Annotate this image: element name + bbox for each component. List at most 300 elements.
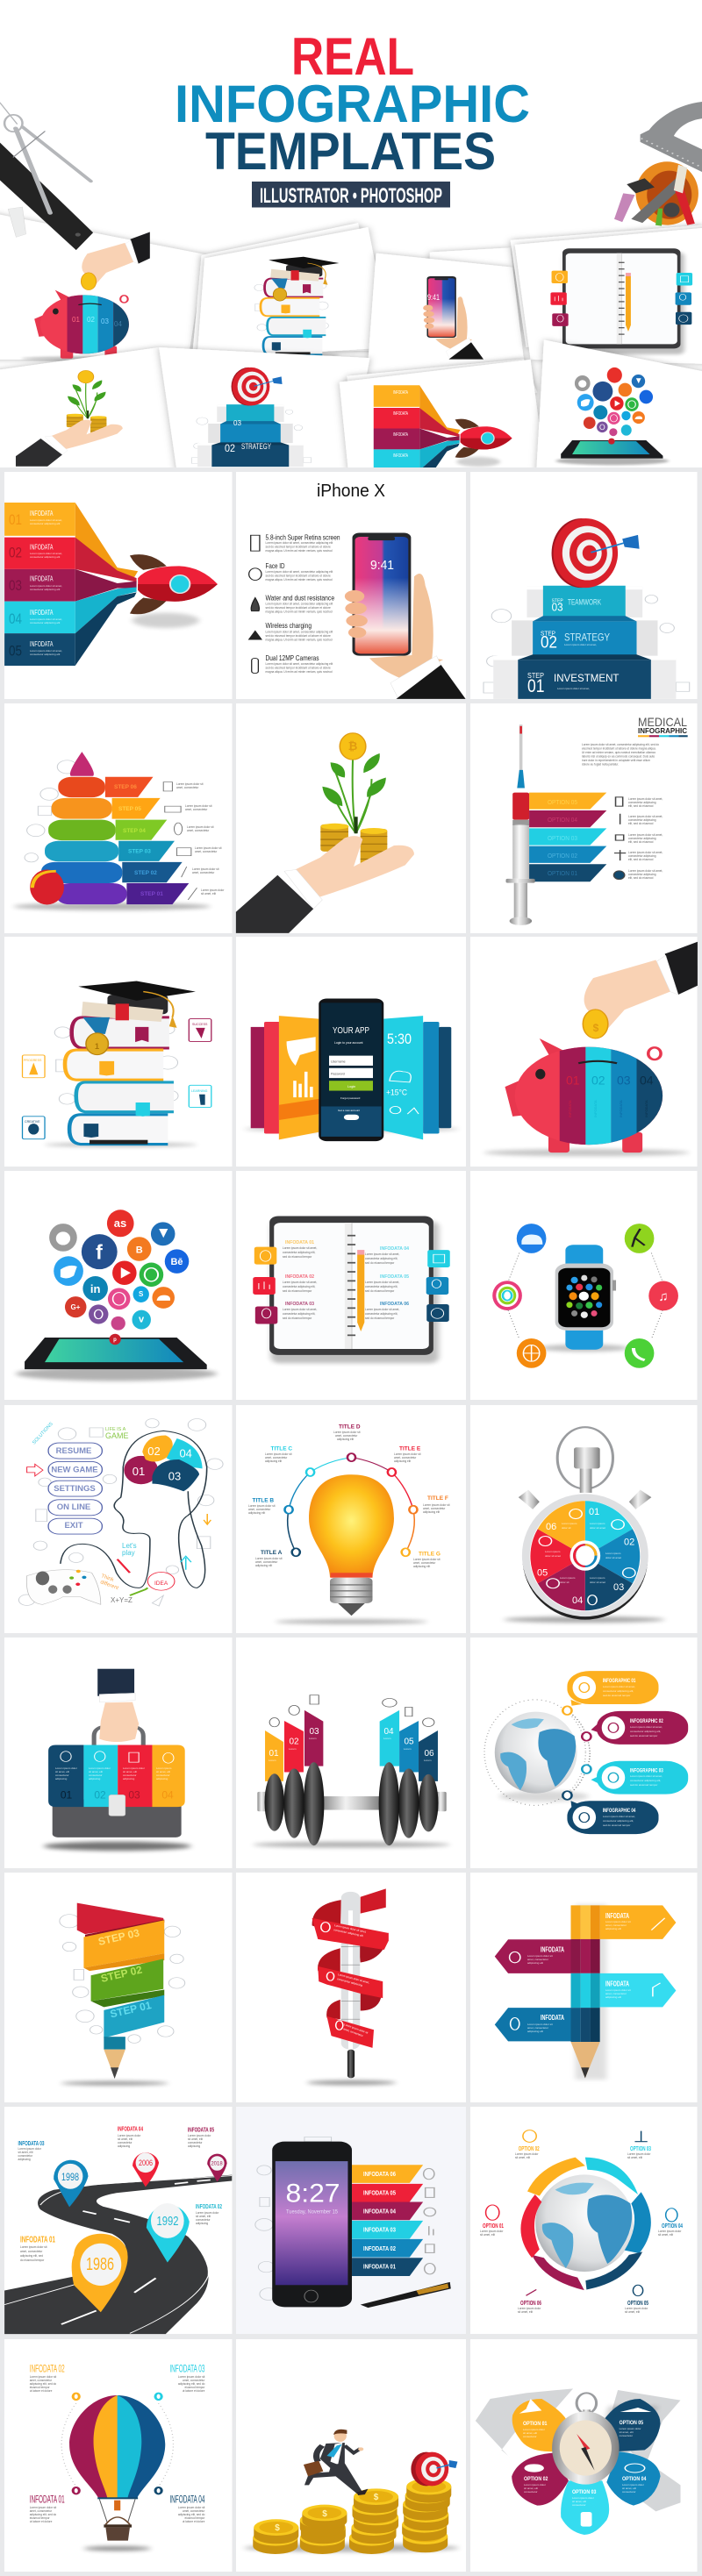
ribbon copy: Lorem ipsum dolor sit amet, [338, 1973, 370, 1985]
doodle captions: GAME [105, 1431, 129, 1440]
band labels: INFODATA 03 [363, 2228, 396, 2234]
band labels: INFODATA 01 [363, 2265, 396, 2271]
menu labels [51, 1446, 98, 1531]
step labels: STEP [527, 672, 544, 680]
piggy numbers: 02 [591, 1074, 605, 1088]
callout titles [603, 1678, 663, 1814]
paper: phone card [367, 247, 524, 375]
pin years: 2018 [211, 2161, 223, 2166]
ribbon copy: Lorem ipsum dolor sit amet, [334, 1923, 367, 1934]
menu labels: RESUME [56, 1446, 91, 1456]
road copy: adipiscing [18, 2158, 31, 2161]
balloon copy: ut labore et dolore [183, 2389, 205, 2393]
road copy: amet, consectetur [20, 2250, 43, 2253]
option labels: OPTION 03 [630, 2146, 651, 2152]
step labels: STRATEGY [564, 631, 610, 643]
road copy: adipiscing elit, sed [20, 2254, 43, 2258]
bulb captions [248, 1431, 450, 1568]
feature text: magna aliqua. Ut enim ad minim veniam, quis nostrud [265, 639, 333, 642]
notebook entries: INFODATA 04 [380, 1246, 409, 1252]
band labels: 03 [9, 577, 22, 594]
road copy: adipiscing [118, 2144, 130, 2148]
panel: hot air balloon [4, 2339, 232, 2572]
app screen text: Username [331, 1060, 346, 1063]
coin stacks and runner artwork [244, 2430, 459, 2554]
ring captions [176, 782, 225, 896]
panel: piggy bank [470, 937, 698, 1167]
hero card labels: 03 [233, 419, 242, 427]
ring labels [114, 784, 163, 897]
step labels: Lorem ipsum dolor sit amet, [557, 687, 590, 690]
panel: light bulb timeline [236, 1405, 466, 1633]
option captions: consectetur adipiscing [628, 873, 656, 876]
ribbon step labels: STEP 02 [100, 1963, 144, 1985]
ring labels: STEP 01 [140, 891, 163, 897]
ring captions: Lorem ipsum dolor sit [187, 825, 214, 829]
briefcase copy: sit amet, elit [55, 1770, 69, 1773]
coin dollar signs: $ [374, 2493, 379, 2502]
panel: rocket infographic [4, 472, 232, 699]
stopwatch copy: dolor sit [560, 1581, 569, 1584]
bulb titles: TITLE D [339, 1424, 361, 1431]
phone heading: iPhone X [317, 482, 385, 501]
pin years: 1986 [86, 2255, 114, 2274]
panel: target stairs [470, 472, 697, 699]
paper: books card [192, 223, 391, 360]
notebook entries: INFODATA 05 [380, 1274, 409, 1280]
bulb titles: TITLE A [261, 1550, 283, 1556]
paper: notebook card [511, 225, 702, 364]
option copy: sit amet, elit [480, 2233, 495, 2237]
bulb captions: Lorem ipsum dolor sit [394, 1452, 421, 1456]
notebook body copy: Lorem ipsum dolor sit amet, [365, 1281, 399, 1284]
globe artwork [484, 1671, 688, 1834]
title [175, 27, 530, 181]
bulb titles: TITLE B [253, 1498, 274, 1504]
feature text: sed do eiusmod tempor incididunt ut labore et dolore [265, 546, 331, 549]
callout titles: INFOGRAPHIC 01 [603, 1678, 636, 1684]
balloon copy: adipiscing elit, sed do [30, 2382, 56, 2386]
piggy stripe captions: INFODATA [593, 1100, 598, 1117]
option labels: OPTION 05 [627, 2301, 648, 2307]
coin dollar signs: $ [322, 2509, 327, 2519]
step labels: Lorem ipsum dolor sit amet, [564, 643, 597, 646]
balloon copy: eiusmod tempor [185, 2386, 205, 2389]
social icon letters: f [96, 1240, 103, 1263]
stopwatch numbers: 05 [537, 1568, 548, 1579]
road copy: Lorem ipsum dolor [18, 2147, 42, 2151]
ribbon copy: consectetur adipiscing elit [333, 1928, 363, 1937]
social icon letters: v [139, 1315, 145, 1325]
option labels: OPTION 01 [548, 871, 577, 877]
dumbbell copy [269, 1737, 432, 1762]
briefcase copy: sit amet, elit [89, 1770, 103, 1773]
compass option copy: Lorem ipsum dolor [523, 2428, 545, 2431]
bulb captions: Lorem ipsum dolor sit [413, 1558, 441, 1561]
doodle captions: Let's [122, 1542, 137, 1550]
band labels: INFODATA 05 [363, 2191, 396, 2197]
feature text: Face ID [265, 561, 284, 570]
option copy: Lorem ipsum dolor [658, 2230, 682, 2233]
feature text: Lorem ipsum dolor sit amet, consectetur adipiscing elit [265, 570, 333, 574]
ring labels: STEP 03 [128, 849, 151, 854]
feature text: sed do eiusmod tempor incididunt ut labore et dolore [265, 634, 331, 638]
callout copy: Lorem ipsum dolor sit amet, [630, 1774, 663, 1778]
road copy: Lorem ipsum dolor sit [20, 2245, 47, 2249]
plant in hand artwork [236, 733, 414, 933]
doodle captions: play [122, 1549, 135, 1557]
notebook body copy: sed do eiusmod tempor [283, 1289, 312, 1293]
pin years: 2006 [139, 2159, 153, 2167]
dumbbell step numbers: 05 [404, 1737, 414, 1747]
feature text: magna aliqua. Ut enim ad minim veniam, quis nostrud [265, 670, 333, 674]
road copy: sit amet, elit [118, 2137, 133, 2141]
bulb captions: adipiscing elit [337, 1438, 354, 1441]
menu labels: NEW GAME [51, 1465, 98, 1475]
option copy: sit amet, elit [518, 2310, 533, 2314]
rocket artwork [4, 503, 218, 666]
band labels: consectetur adipiscing elit [30, 555, 61, 559]
callout copy: Lorem ipsum dolor sit amet, [603, 1685, 635, 1688]
brain numbers: 02 [147, 1445, 161, 1458]
dumbbell copy: Lorem [424, 1759, 432, 1762]
notebook body copy: Lorem ipsum dolor sit amet, [365, 1252, 399, 1256]
notebook body copy: consectetur adipiscing elit, [365, 1257, 398, 1260]
option labels: OPTION 01 [483, 2223, 504, 2230]
ring captions: Lorem ipsum dolor sit [176, 782, 204, 786]
compass option copy: sit amet, elit [572, 2500, 586, 2503]
ring captions: sit amet, elit [201, 892, 216, 896]
bulb titles: TITLE F [427, 1495, 448, 1502]
road copy: consectetur [118, 2141, 133, 2144]
syringe and option bands [506, 724, 688, 925]
bulb captions: amet, consectetur [413, 1561, 436, 1565]
option copy: sit amet, elit [627, 2156, 642, 2159]
briefcase copy: consectetur [89, 1773, 103, 1777]
signpost labels: INFODATA [605, 1980, 629, 1987]
option labels: OPTION 03 [548, 836, 577, 842]
hero card labels: 03 [101, 318, 109, 325]
protractor [641, 101, 702, 176]
step labels [527, 598, 620, 696]
bulb titles: TITLE C [270, 1446, 292, 1452]
compass option copy [523, 2427, 644, 2507]
notebook entries: INFODATA 02 [285, 1274, 314, 1280]
brain numbers: 04 [179, 1447, 192, 1460]
social icon letters: Bē [170, 1257, 183, 1267]
briefcase copy: adipiscing [89, 1777, 101, 1780]
callout copy: Lorem ipsum dolor sit amet, [603, 1815, 635, 1818]
compass option copy: consectetur [523, 2435, 537, 2438]
balloon copy: amet, consectetur [30, 2379, 53, 2382]
balloon copy: adipiscing elit, sed do [178, 2513, 205, 2516]
balloon titles: INFODATA 02 [30, 2364, 65, 2374]
road copy: sit amet, elit [18, 2151, 33, 2154]
panel: phone clock bands [236, 2107, 466, 2334]
panel: smartwatch [470, 1171, 697, 1400]
panel: dumbbell [236, 1638, 466, 1868]
briefcase copy: Lorem ipsum dolor [89, 1766, 111, 1770]
feature text: magna aliqua. Ut enim ad minim veniam, quis nostrud [265, 549, 333, 553]
hero collage [0, 101, 702, 491]
compass option labels: OPTION 02 [524, 2476, 548, 2482]
compass option labels: OPTION 03 [572, 2489, 597, 2495]
road copy [18, 2134, 219, 2262]
bulb captions: amet, consectetur [265, 1456, 288, 1459]
road copy: consectetur [18, 2154, 33, 2158]
hero card labels: 02 [87, 316, 95, 324]
bulb captions: adipiscing elit [265, 1459, 282, 1463]
stopwatch copy: Lorem ipsum [605, 1552, 621, 1555]
band labels [363, 2172, 396, 2271]
signpost copy: amet, consectetur [527, 2026, 548, 2030]
brain artwork [18, 1419, 223, 1606]
title line: TEMPLATES: TEMPLATES [205, 122, 496, 181]
road labels: INFODATA 01 [20, 2235, 55, 2244]
notebook body copy: sed do eiusmod tempor [283, 1317, 312, 1320]
stopwatch copy: Lorem ipsum [562, 1522, 577, 1525]
panel: pencil signpost [470, 1873, 697, 2102]
medical paragraph [582, 743, 659, 767]
band labels: Lorem ipsum dolor sit amet, [30, 552, 62, 555]
option labels: OPTION 06 [520, 2301, 541, 2307]
signpost copy: adipiscing elit [605, 1995, 621, 1999]
briefcase numbers [61, 1788, 174, 1801]
ring labels: STEP 04 [123, 828, 146, 834]
balloon copy: amet, consectetur [183, 2379, 205, 2382]
briefcase copy: consectetur [156, 1773, 170, 1777]
stopwatch copy: Lorem ipsum [560, 1576, 576, 1580]
bulb captions: Lorem ipsum dolor sit [248, 1504, 276, 1508]
band labels: consectetur adipiscing elit [30, 522, 61, 525]
panel: pencil ribbon [4, 1873, 232, 2102]
social icon letters: G+ [71, 1303, 81, 1311]
briefcase copy: consectetur [123, 1773, 137, 1777]
social artwork [16, 1210, 217, 1381]
menu labels: EXIT [64, 1521, 83, 1531]
paper: rocket card [340, 359, 545, 491]
road labels: INFODATA 05 [188, 2128, 214, 2134]
signpost copy: adipiscing elit [527, 2030, 543, 2033]
dumbbell step numbers: 03 [309, 1727, 319, 1737]
stopwatch copy: dolor sit amet [545, 1554, 561, 1558]
stopwatch numbers: 06 [546, 1522, 556, 1532]
road labels: INFODATA 03 [18, 2141, 45, 2147]
bulb titles: TITLE E [399, 1446, 421, 1452]
signpost copy: Lorem ipsum dolor sit [605, 1988, 631, 1992]
piggy stripe captions: INFODATA [644, 1100, 648, 1117]
callout titles: INFOGRAPHIC 04 [603, 1808, 636, 1814]
compass option labels: OPTION 01 [523, 2421, 548, 2427]
option captions: Lorem ipsum dolor sit amet, [628, 815, 663, 818]
feature text: Wireless charging [265, 621, 312, 630]
option labels: OPTION 02 [519, 2146, 540, 2152]
notebook artwork [253, 1216, 450, 1363]
option captions: Lorem ipsum dolor sit amet, [628, 797, 663, 801]
paper: piggy card [0, 213, 204, 360]
menu labels: SETTINGS [54, 1484, 96, 1494]
app phone artwork [244, 999, 459, 1141]
callout copy: consectetur adipiscing elit, [630, 1730, 661, 1733]
ribbon step labels: STEP 03 [97, 1926, 141, 1948]
balloon copy: amet, consectetur [183, 2509, 205, 2513]
step labels: 03 [552, 600, 563, 613]
clock text: 8:27 [286, 2179, 340, 2209]
ring captions: Lorem ipsum dolor sit [195, 846, 222, 850]
piggy artwork [484, 942, 698, 1156]
compass option labels: OPTION 05 [620, 2420, 643, 2426]
ring labels: STEP 05 [118, 806, 141, 812]
balloon copy: ut labore et dolore [30, 2520, 53, 2523]
pencil cup [614, 161, 698, 226]
app screen text: Login to your account [334, 1041, 362, 1045]
tag labels and medal number: SUCCESS [192, 1023, 208, 1026]
panel: iPhone X features [236, 472, 466, 699]
doodle captions: SOLUTIONS [32, 1421, 54, 1445]
feature text: Lorem ipsum dolor sit amet, consectetur adipiscing elit [265, 541, 333, 545]
road copy: sit amet, elit [188, 2137, 203, 2141]
bulb captions: amet, consectetur [335, 1434, 358, 1438]
notebook body copy: Lorem ipsum dolor sit amet, [283, 1246, 317, 1250]
briefcase copy: adipiscing [123, 1777, 135, 1780]
compass option copy: Lorem ipsum dolor [620, 2427, 641, 2430]
panel: globe arrows [470, 2107, 697, 2334]
stopwatch numbers [537, 1507, 634, 1606]
feature text: 5.8-inch Super Retina screen [265, 532, 340, 541]
eraser [8, 207, 26, 237]
dumbbell step numbers: 04 [383, 1727, 394, 1737]
compass option copy: Lorem ipsum dolor [572, 2496, 594, 2500]
step labels: STEP [541, 630, 555, 638]
hero card labels: 04 [114, 320, 122, 328]
balloon copy: adipiscing elit, sed do [30, 2513, 56, 2516]
signpost copy: amet, consectetur [605, 1923, 627, 1927]
balloon copy [30, 2375, 205, 2523]
option labels: OPTION 04 [548, 817, 577, 824]
piggy numbers [566, 1074, 654, 1088]
balloon copy: adipiscing elit, sed do [178, 2382, 205, 2386]
social icon letters: in [90, 1282, 101, 1295]
band labels: 02 [9, 545, 22, 561]
panel: game brain [4, 1405, 232, 1633]
social icon letters: as [114, 1217, 126, 1230]
doodle captions: X+Y=Z [111, 1596, 133, 1604]
option labels: OPTION 04 [662, 2223, 683, 2230]
signpost copy: amet, consectetur [527, 1958, 548, 1961]
callout copy: sed do eiusmod tempor [630, 1783, 657, 1787]
ribbon step labels: STEP 01 [109, 1999, 153, 2020]
notebook body copy: consectetur adipiscing elit, [365, 1285, 398, 1288]
road copy: consectetur [196, 2218, 211, 2222]
briefcase copy: consectetur [55, 1773, 69, 1777]
dumbbell copy: Lorem [269, 1759, 276, 1762]
option copy: Lorem ipsum dolor [625, 2307, 648, 2310]
band labels: Lorem ipsum dolor sit amet, [30, 617, 62, 621]
notebook body copy: consectetur adipiscing elit, [283, 1285, 315, 1288]
road copy: Lorem ipsum dolor [188, 2134, 211, 2137]
panel: businessman on coins [236, 2339, 466, 2572]
ring captions: amet, consectetur [176, 786, 199, 789]
balloon copy: Lorem ipsum dolor sit [30, 2375, 56, 2379]
compass option labels: OPTION 04 [622, 2476, 647, 2482]
option copy: sit amet, elit [658, 2233, 673, 2237]
notebook body copy: consectetur adipiscing elit, [283, 1312, 315, 1316]
compass tool [0, 103, 91, 213]
notebook body copy: consectetur adipiscing elit, [283, 1251, 315, 1254]
road copy: Lorem ipsum dolor [196, 2211, 219, 2215]
hero card labels: 9:41 [427, 293, 440, 302]
ring captions: Lorem ipsum dolor sit [185, 804, 212, 808]
compass option copy: consectetur [622, 2490, 636, 2494]
signpost copy: adipiscing elit [605, 1927, 621, 1930]
panel: notebook [236, 1171, 466, 1400]
ribbon copy: amet, consectetur [343, 2027, 363, 2037]
software badge: ILLUSTRATOR • PHOTOSHOP [260, 184, 442, 208]
app screen text: Get a new account [338, 1109, 360, 1112]
option copy [480, 2152, 682, 2314]
piggy stripe captions: INFODATA [619, 1100, 623, 1117]
compass artwork [476, 2388, 681, 2535]
doodle captions: Think [100, 1573, 115, 1583]
tag labels and medal number: CREATIVE [25, 1120, 40, 1124]
bulb captions: adipiscing elit [423, 1510, 440, 1514]
callout copy: consectetur adipiscing elit, [603, 1689, 634, 1693]
hero card labels: 01 [72, 316, 80, 324]
bulb captions: amet, consectetur [255, 1560, 278, 1564]
briefcase copy: Lorem ipsum [156, 1766, 172, 1770]
ribbon copy: consectetur adipiscing [337, 1977, 363, 1987]
band labels: INFODATA 04 [363, 2209, 396, 2216]
panel: thermometer ribbon [236, 1873, 466, 2102]
bitcoin symbol: ₿ [348, 739, 357, 753]
dumbbell step numbers: 06 [424, 1749, 434, 1759]
medical paragraph: eiusmod tempor incididunt ut labore et dolore magna aliqua. [582, 747, 656, 751]
option captions: consectetur adipiscing [628, 854, 656, 858]
signpost artwork [495, 1904, 676, 2080]
notebook body copy: sed do eiusmod tempor [365, 1317, 395, 1320]
signpost copy: Lorem ipsum dolor sit [527, 1954, 553, 1958]
stopwatch copy: dolor sit amet [590, 1526, 605, 1530]
panel: road timeline [4, 2107, 232, 2334]
option captions: Lorem ipsum dolor sit amet, [628, 833, 663, 837]
clock text: Tuesday, November 15 [286, 2210, 339, 2216]
bulb captions: Lorem ipsum dolor sit [255, 1557, 283, 1560]
stopwatch numbers: 03 [613, 1582, 624, 1593]
balloon copy: Lorem ipsum dolor sit [178, 2375, 204, 2379]
notebook body copy: sed do eiusmod tempor [365, 1289, 395, 1293]
step labels: INVESTMENT [554, 672, 620, 684]
balloon copy: amet, consectetur [30, 2509, 53, 2513]
bulb captions: adipiscing elit [413, 1565, 430, 1568]
notebook entries: INFODATA 03 [285, 1302, 314, 1307]
paper: social card [536, 339, 702, 471]
panel: graduation books [4, 937, 232, 1167]
road copy: adipiscing [196, 2222, 208, 2225]
callout copy: Lorem ipsum dolor sit amet, [630, 1725, 663, 1729]
bulb artwork [276, 1453, 427, 1624]
band labels: INFODATA [30, 640, 54, 648]
road labels: INFODATA 04 [118, 2127, 143, 2133]
dumbbell step numbers [269, 1727, 434, 1759]
feature text: Dual 12MP Cameras [265, 653, 319, 662]
menu labels: ON LINE [57, 1502, 90, 1512]
briefcase copy: sit amet, elit [123, 1770, 137, 1773]
phone bands artwork [255, 2137, 451, 2308]
piggy numbers: 03 [617, 1074, 631, 1088]
option labels: OPTION 05 [548, 800, 577, 806]
dumbbell copy: Lorem [289, 1747, 297, 1751]
option copy: Lorem ipsum dolor [627, 2152, 651, 2156]
